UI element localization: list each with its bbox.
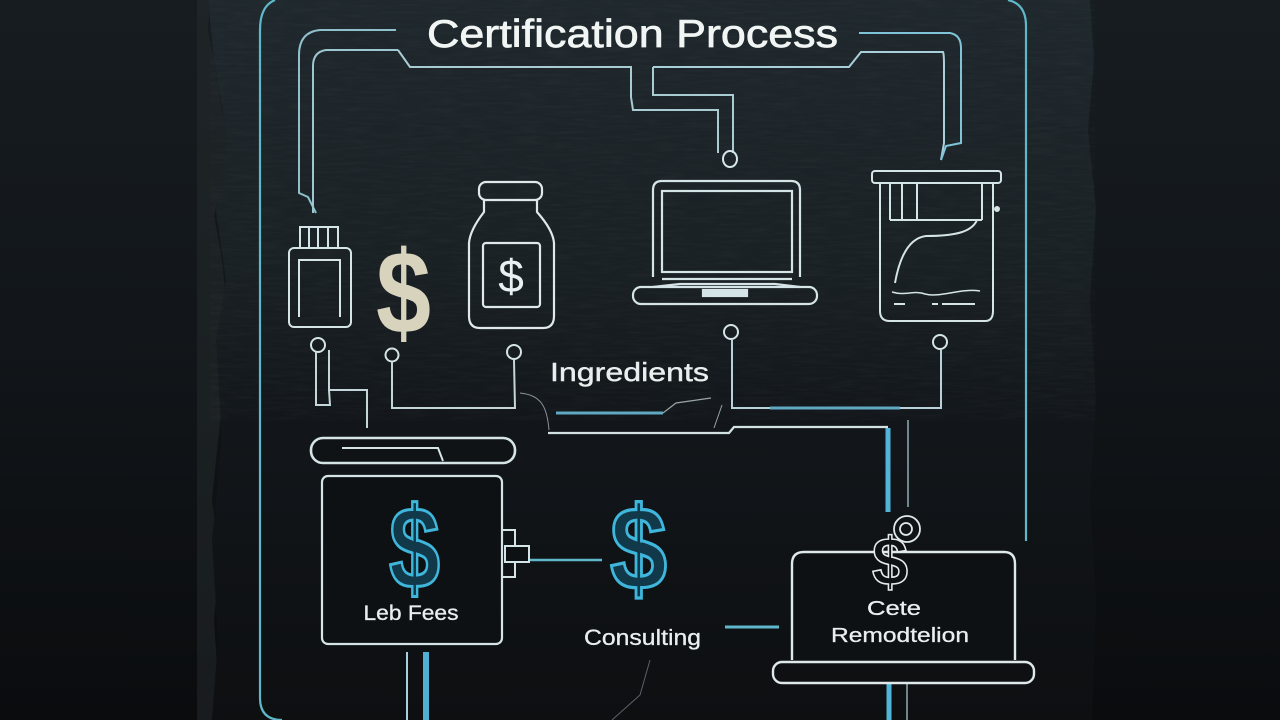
- connector line: [725, 626, 779, 628]
- connector tab: [502, 530, 529, 577]
- label: remediation: Remodtelion: [831, 625, 969, 647]
- outer frame: [260, 0, 1026, 720]
- icon: jar: [872, 171, 1001, 321]
- icon: dollar bottle: [469, 182, 554, 328]
- pill bar: [311, 438, 515, 463]
- label: ingredients: Ingredients: [550, 357, 709, 387]
- icon: blue dollar in box: $: [389, 483, 440, 613]
- icon: sketched dollar: $: [872, 524, 908, 600]
- icon: blue dollar consulting: $: [610, 483, 667, 615]
- label: cete: Cete: [867, 598, 921, 620]
- icon: beige dollar: $: [376, 227, 431, 359]
- icon: dollar bottle: $: [498, 250, 524, 302]
- circuit lines: [316, 340, 941, 720]
- connector line: [530, 559, 602, 561]
- connector nodes: [311, 325, 947, 362]
- label: lab fees: Leb Fees: [364, 602, 458, 625]
- connectors from title: [299, 30, 961, 213]
- icon: laptop: [633, 181, 817, 304]
- panel: lab fees: [322, 476, 502, 644]
- icon: small bottle: [289, 227, 351, 327]
- label: consulting: Consulting: [584, 625, 701, 650]
- icon: spiral node: [894, 516, 920, 542]
- panel: cert remediation laptop: [773, 516, 1034, 683]
- title: Certification Process: [427, 13, 838, 56]
